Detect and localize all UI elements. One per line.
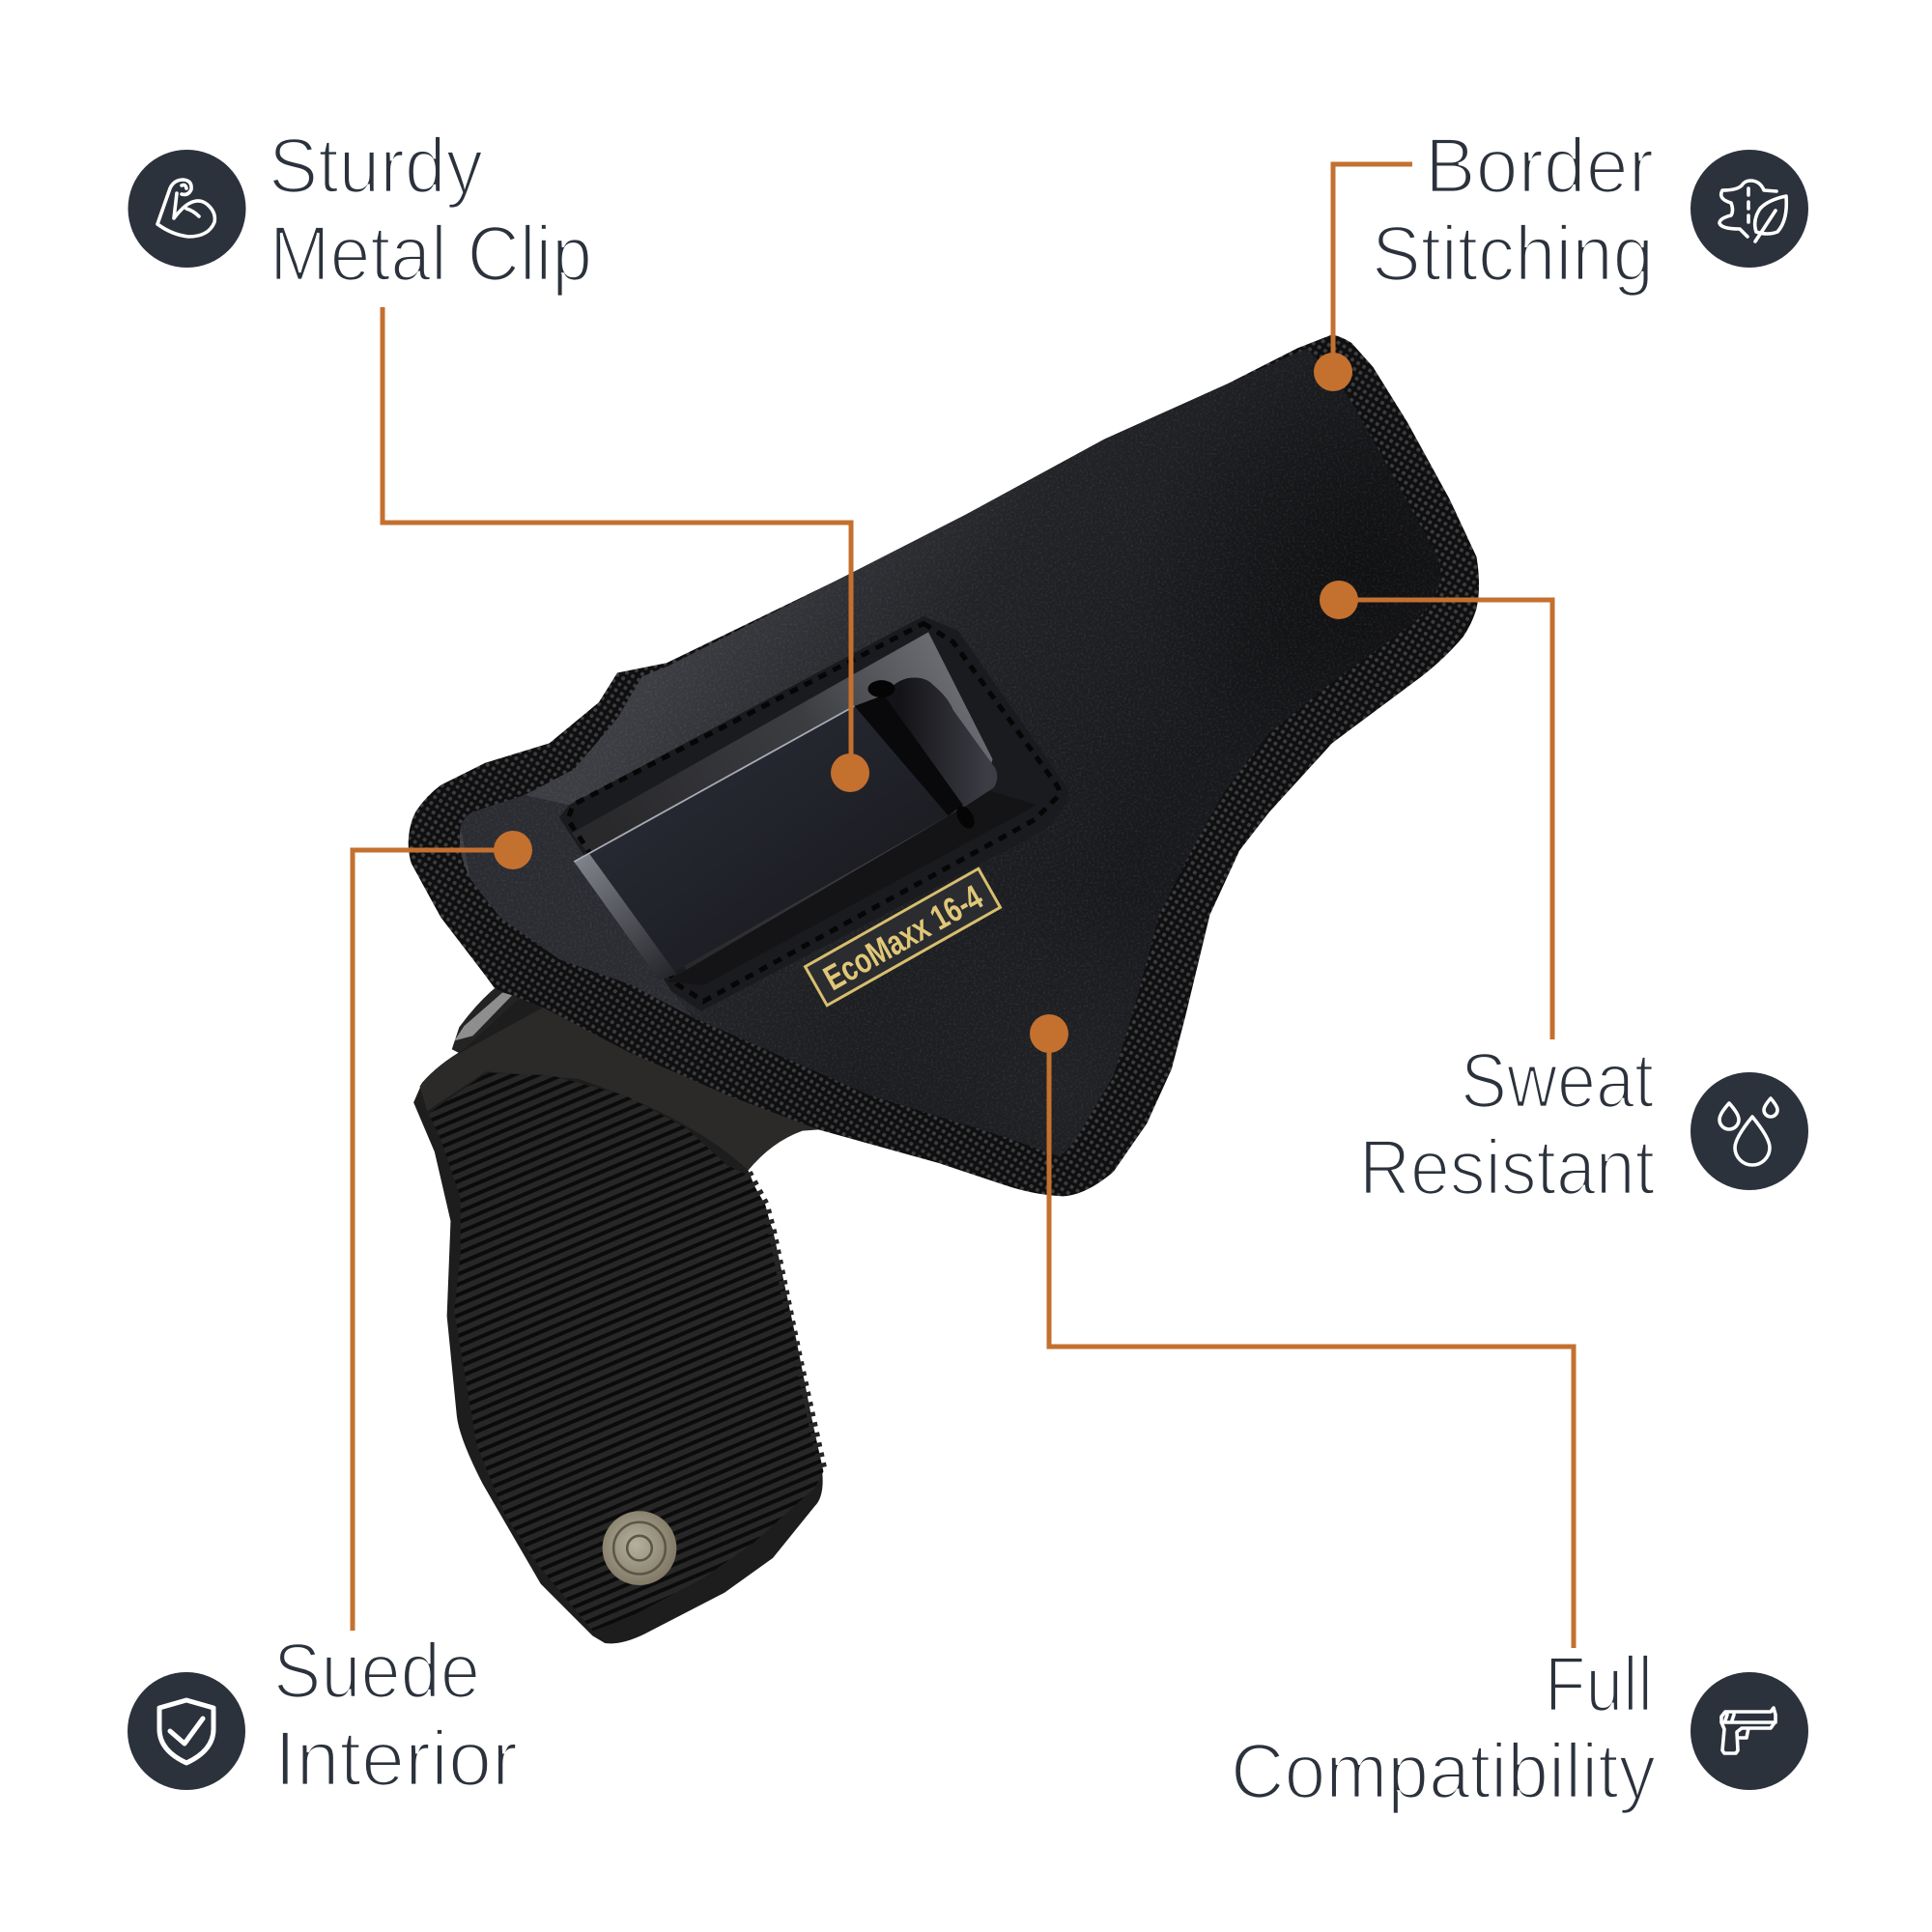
leather grain texture [460,351,1440,1155]
callout line: sturdy metal clip [383,307,851,773]
heading: sweat resistant [1359,1037,1655,1211]
revolver grip [413,987,827,1643]
grip upper frame [420,1008,818,1171]
callout line: suede interior [353,850,513,1631]
brand badge [806,868,1000,1006]
callout dot: sweat resistant [1320,581,1358,619]
callout line: sweat resistant [1339,600,1552,1039]
grip screw medallion [603,1511,676,1585]
callout line: border stitching [1333,164,1412,372]
holster leather body [460,348,1441,1157]
lower pocket flap [667,790,1037,985]
heading: border stitching: Border [1425,123,1654,210]
heading: border stitching [1372,123,1654,298]
callout dot: suede interior [494,831,532,869]
grip grooves [428,1073,823,1631]
pocket stitching [568,623,1060,1001]
heading: sturdy metal clip: Sturdy [269,123,483,210]
callout line: full compatibility [1049,1034,1574,1648]
heading: sturdy metal clip: Metal Clip [270,211,592,298]
icon: shield with check [128,1672,245,1790]
pocket inner leather [572,632,993,976]
heading: full compatibility: Full [1545,1641,1653,1728]
heading: border stitching: Stitching [1372,211,1654,298]
icon: flexed muscle [128,150,245,268]
heading: sweat resistant: Resistant [1359,1124,1655,1211]
heading: suede interior [273,1628,518,1803]
product photo: holster and revolver grip [408,333,1493,1643]
holster webbing border [409,334,1479,1196]
callout dot: border stitching [1314,353,1352,391]
callout dot: full compatibility [1030,1014,1068,1053]
badge text: EcoMaxx 16-4 [816,877,989,998]
icon: pistol [1690,1672,1808,1790]
clip slot holes [867,680,895,697]
suede side panel [461,795,693,1017]
heading: sweat resistant: Sweat [1461,1037,1654,1124]
callout dot: sturdy metal clip [831,753,869,792]
icon: leather and leaf [1690,150,1808,268]
clip pocket [559,616,1068,1011]
icon: sweat drops [1690,1072,1808,1190]
heading: suede interior: Suede [273,1628,480,1715]
heading: sturdy metal clip [269,123,592,298]
heading: full compatibility [1231,1641,1656,1815]
heading: full compatibility: Compatibility [1231,1728,1656,1815]
grip edge teeth [748,1173,823,1471]
heading: suede interior: Interior [274,1716,518,1803]
metal belt clip [574,677,997,980]
revolver metal frame [452,978,555,1056]
